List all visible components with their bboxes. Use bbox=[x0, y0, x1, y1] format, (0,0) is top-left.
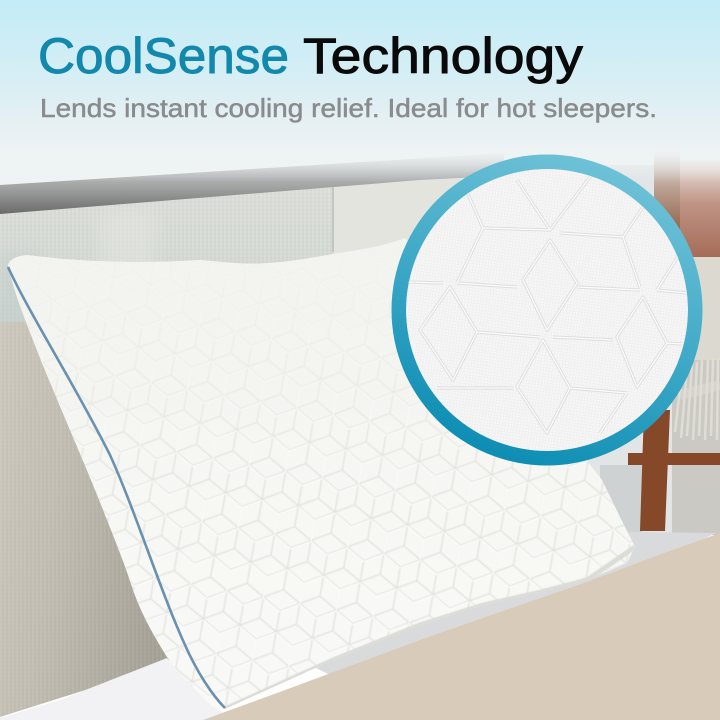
pillow body bbox=[8, 238, 635, 709]
head rail bbox=[0, 153, 505, 214]
upholstered headboard bbox=[0, 322, 180, 717]
brown blanket bbox=[680, 160, 720, 257]
quilted cube pattern bbox=[8, 254, 635, 709]
subtitle: Lends instant cooling relief. Ideal for hot sleepers. bbox=[40, 93, 657, 123]
fade of scene into the sky bbox=[0, 150, 720, 182]
zoom circle callout bbox=[392, 154, 702, 466]
background sky gradient bbox=[0, 0, 720, 152]
enlarged cube stitching bbox=[407, 173, 687, 433]
blanket fringe bbox=[675, 358, 720, 440]
tan bed blanket bbox=[203, 533, 720, 720]
title word: CoolSense: CoolSense bbox=[38, 28, 289, 84]
right wall bbox=[480, 165, 720, 535]
blue piping bbox=[8, 267, 225, 708]
fabric close-up bbox=[406, 169, 688, 451]
area behind fringe bbox=[672, 360, 720, 535]
chair leg and crossbar bbox=[628, 410, 720, 531]
chair post bbox=[654, 150, 680, 235]
teal gradient ring bbox=[392, 154, 702, 466]
wall panels bbox=[0, 168, 480, 338]
white sheet left bbox=[0, 658, 230, 720]
pillow bbox=[0, 230, 650, 720]
bedroom scene bbox=[0, 150, 720, 720]
lower wall beside chair bbox=[600, 465, 642, 535]
title word: Technology: Technology bbox=[303, 28, 583, 84]
cream blanket bbox=[694, 257, 720, 367]
bed sheet right bbox=[300, 532, 716, 680]
